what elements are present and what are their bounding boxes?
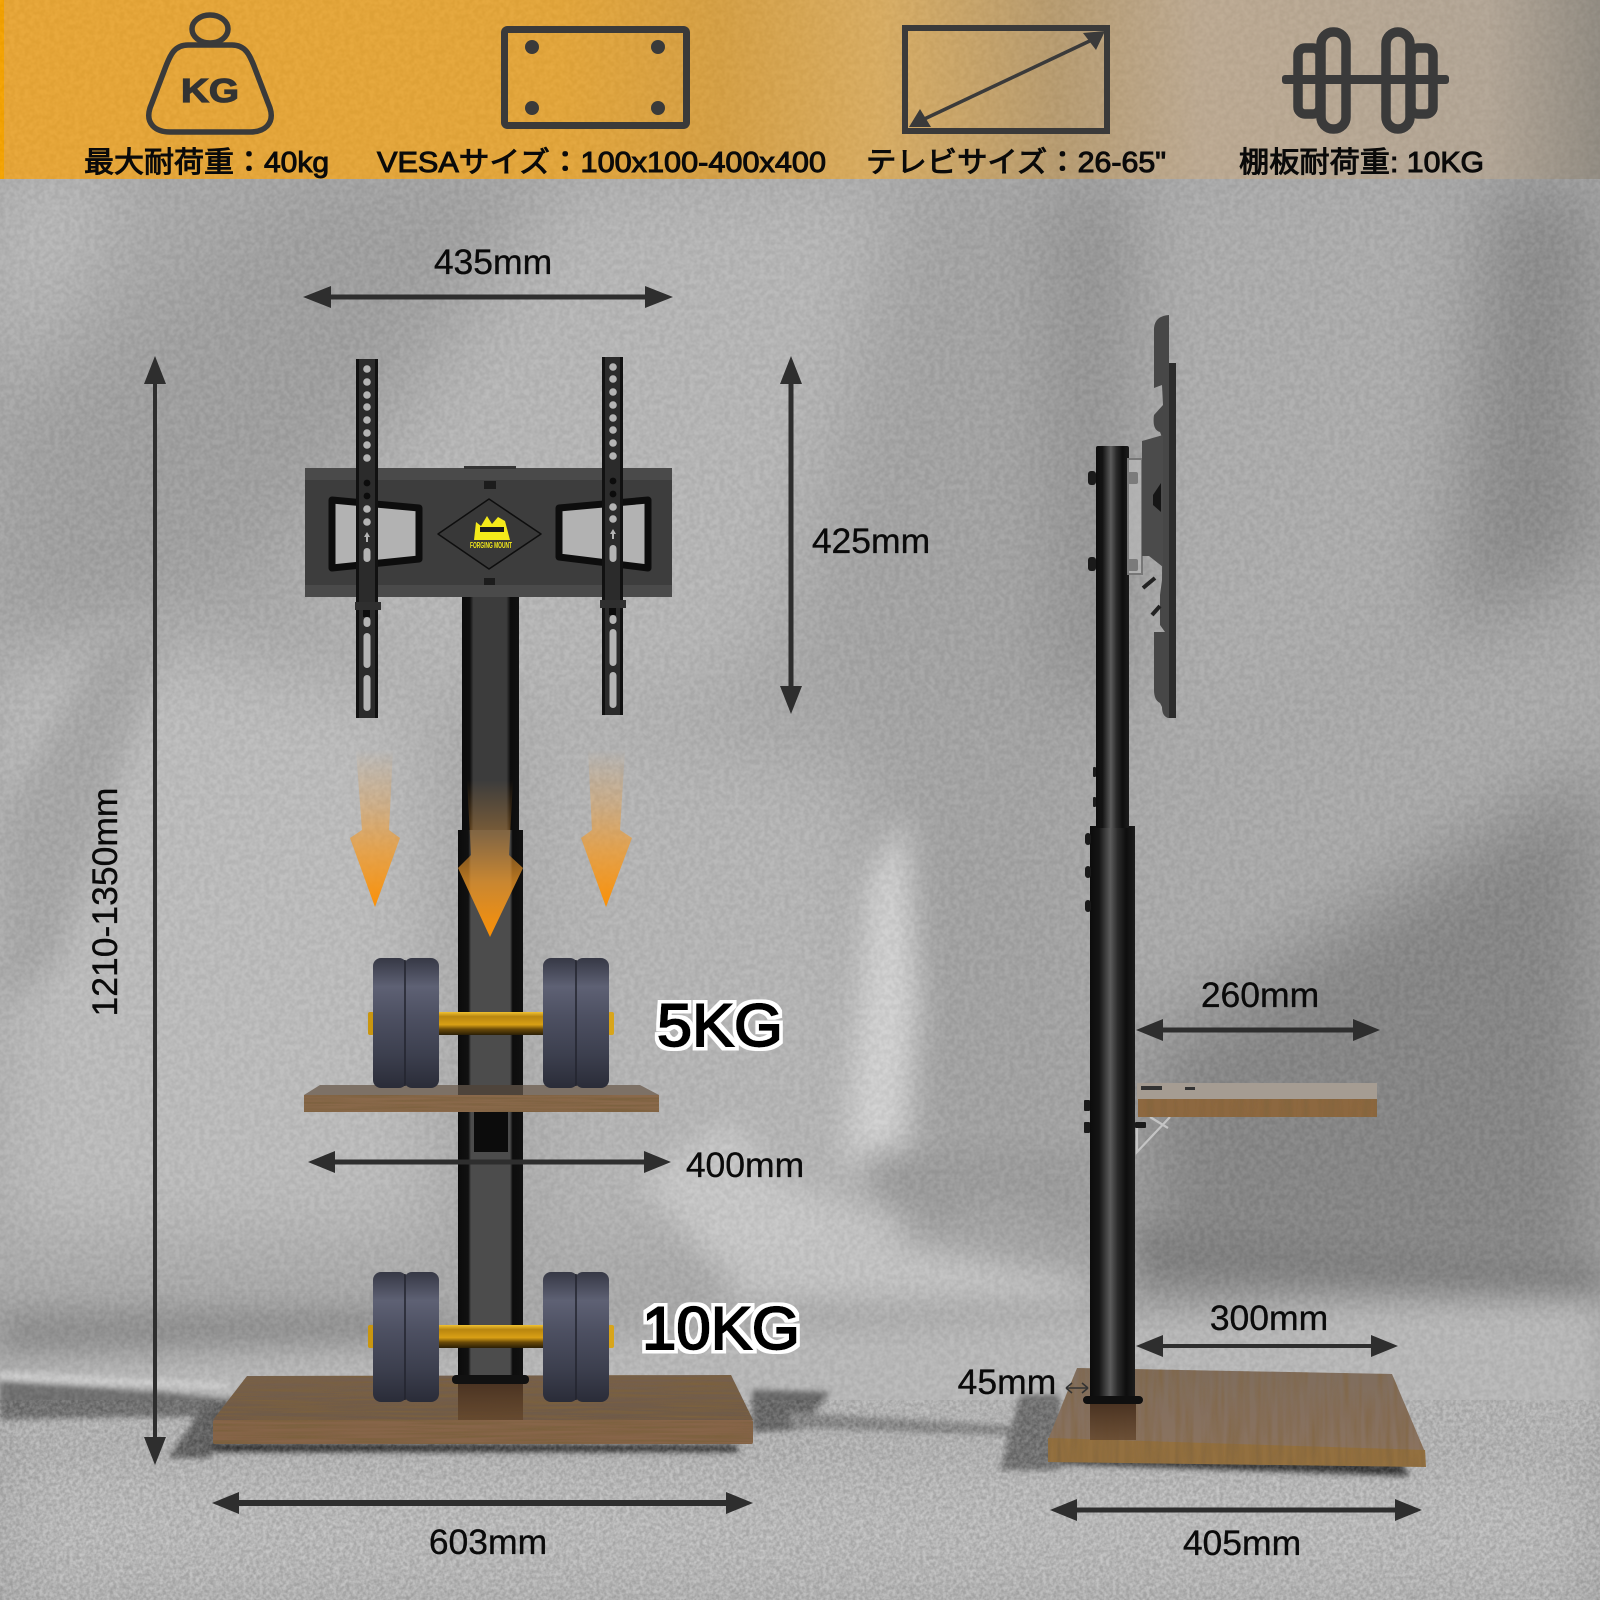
header label: TV size: テレビサイズ：26-65"	[866, 146, 1166, 179]
side shelf	[1137, 1083, 1377, 1117]
lower pole	[1090, 826, 1135, 1396]
left rail	[355, 359, 381, 718]
header label: VESA size: VESAサイズ：100x100-400x400	[377, 146, 826, 179]
weight label: 5KG: 5KG	[657, 992, 783, 1059]
side base plate	[1048, 1368, 1426, 1467]
pole bolts	[1084, 471, 1146, 1133]
header band	[0, 0, 1600, 179]
dimension label: 435mm: 435mm	[434, 242, 552, 282]
arrow: 405mm	[1050, 1499, 1422, 1521]
arrow: 300mm	[1136, 1335, 1398, 1357]
arrow: 400mm	[308, 1151, 671, 1173]
weight label: 10KG: 10KG	[642, 1295, 800, 1362]
header label: shelf load: 棚板耐荷重: 10KG	[1239, 146, 1484, 179]
lower post	[458, 830, 523, 1378]
dimension label: height: 1210-1350mm	[85, 788, 125, 1016]
arrow: height	[144, 356, 166, 1465]
right rail	[600, 357, 626, 715]
logo diamond	[438, 499, 541, 569]
arrow: 425mm	[780, 356, 802, 714]
arrow: 260mm	[1136, 1019, 1380, 1041]
icon: barbell	[1282, 32, 1449, 129]
dimension label: 603mm: 603mm	[429, 1522, 547, 1562]
arrow: down left	[350, 750, 400, 907]
icon: TV diagonal size	[905, 28, 1107, 131]
dimension label: 405mm: 405mm	[1183, 1523, 1301, 1563]
logo diamond: FORGING MOUNT	[470, 541, 512, 550]
side view stand	[1048, 315, 1426, 1467]
arrow: 603mm	[212, 1492, 753, 1514]
dimension label: 300mm: 300mm	[1210, 1298, 1328, 1338]
upper post	[462, 597, 519, 837]
pole foot	[1083, 1396, 1143, 1404]
arrow: down centre	[458, 780, 523, 937]
icon: weight	[149, 15, 271, 132]
middle shelf	[304, 1085, 659, 1152]
right window	[559, 500, 648, 568]
dimension label: 425mm: 425mm	[812, 521, 930, 561]
dimension label: 260mm: 260mm	[1201, 975, 1319, 1015]
arrow: 435mm	[303, 286, 673, 308]
header label: max load: 最大耐荷重：40kg	[84, 146, 329, 179]
side shelf bracket	[1137, 1117, 1170, 1152]
TV mount plate	[305, 466, 672, 597]
dimension label: 400mm: 400mm	[686, 1145, 804, 1185]
left window	[332, 500, 419, 568]
dimension arrows	[144, 286, 1422, 1521]
front view stand	[213, 357, 753, 1444]
side mount plates	[1127, 315, 1176, 718]
dumbbell: 5 kg	[368, 958, 614, 1088]
dumbbell: 10 kg	[368, 1272, 614, 1402]
arrow: down right	[581, 750, 632, 907]
icon: weight: KG	[181, 72, 239, 109]
base plate front	[213, 1375, 753, 1444]
upper pole	[1096, 446, 1129, 828]
arrow: 45mm	[1066, 1383, 1088, 1393]
icon: VESA plate	[504, 30, 686, 126]
dimension label: 45mm: 45mm	[958, 1362, 1056, 1402]
